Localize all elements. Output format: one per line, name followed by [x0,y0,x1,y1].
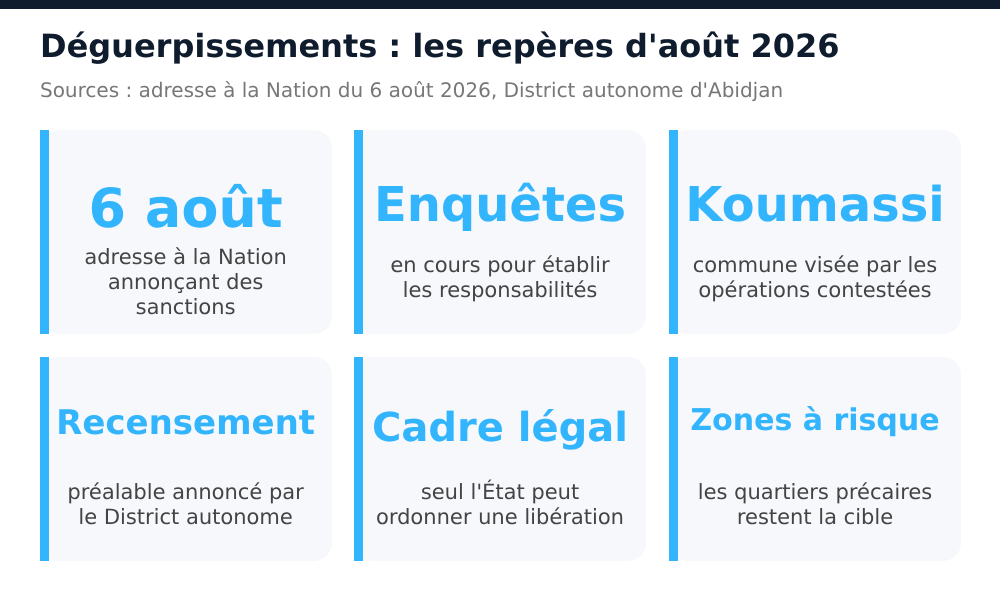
value: Recensement: Recensement [56,403,315,443]
panel: Recensement [40,357,332,561]
description: seul l'État: ordonner une libération [376,505,624,529]
description: adresse à la Nation: adresse à la Nation [84,245,287,269]
description: quartiers précaires: restent la cible [737,505,893,529]
panel: 6 août [40,130,332,334]
description: en cours: en cours pour établir [390,253,610,277]
panel: Koumassi [669,130,961,334]
description: préalable: le District autonome [78,505,293,529]
top bar [0,0,1000,9]
panel: Enquêtes [354,130,646,334]
description: seul l'État: seul l'État peut [421,479,579,504]
description: quartiers précaires: les quartiers précaires [698,480,932,504]
description: commune visée: commune visée par les [693,253,937,277]
value: 6 août: 6 août [89,177,283,240]
value: Enquêtes: Enquêtes [374,177,626,233]
title: Déguerpissements : les repères d'août 2026 [40,27,840,65]
description: adresse à la Nation: annonçant des [108,270,263,294]
panel: Zones à risque [669,357,961,561]
subtitle: sources: Sources : adresse à la Nation du 6 août 2026, District autonome d'Abidjan [40,78,783,102]
value: Zones à risque: Zones à risque [690,403,940,438]
description: adresse à la Nation: sanctions [136,295,236,319]
value: Koumassi: Koumassi [685,177,945,233]
description: en cours: les responsabilités [403,278,597,302]
value: Cadre légal: Cadre légal [372,405,628,451]
description: commune visée: opérations contestées [698,278,932,302]
panel: Cadre légal [354,357,646,561]
description: préalable: préalable annoncé par [67,480,304,504]
